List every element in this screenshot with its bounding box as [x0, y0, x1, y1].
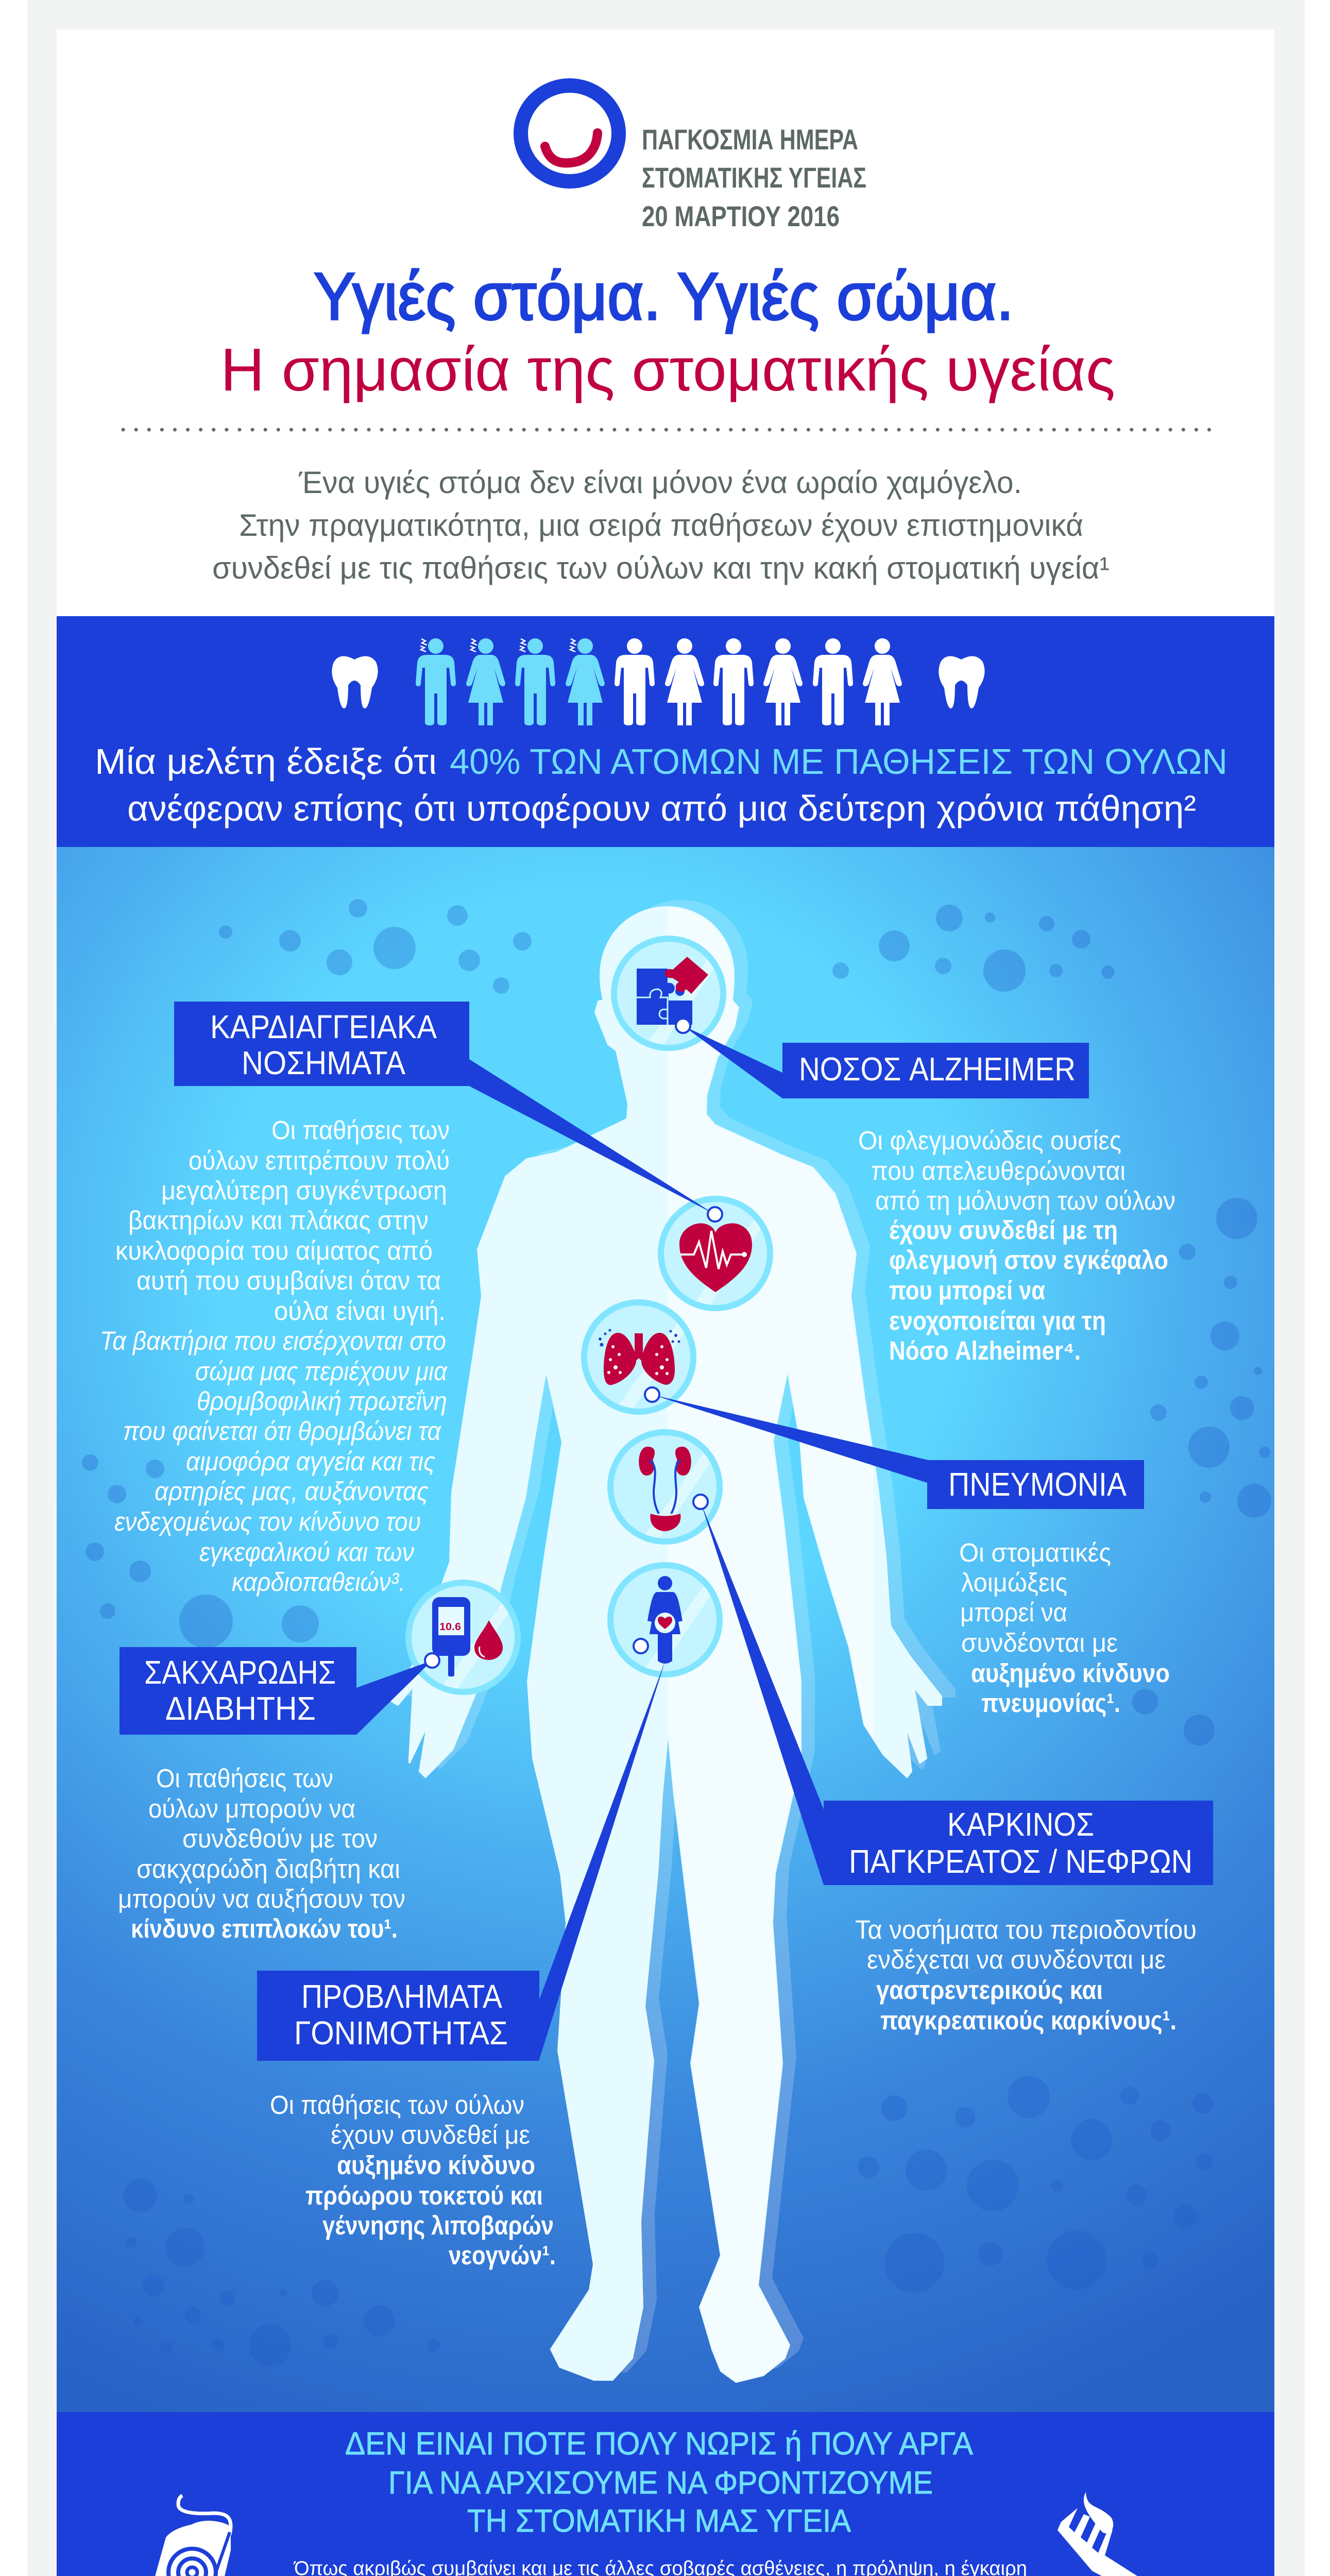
text: pneumonia: Οι στοματικές	[959, 1538, 1111, 1567]
label: pneumonia callout	[645, 1387, 1144, 1509]
text: cardiovascular: ούλα είναι υγιή.	[274, 1296, 446, 1326]
title: Η σημασία της στοματικής υγείας	[220, 336, 1115, 404]
text: alzheimer: που απελευθερώνονται	[871, 1156, 1126, 1185]
text: cardiovascular: αυτή που συμβαίνει όταν τα	[137, 1266, 441, 1295]
prevention heading: ΓΙΑ ΝΑ ΑΡΧΙΣΟΥΜΕ ΝΑ ΦΡΟΝΤΙΖΟΥΜΕ	[388, 2465, 933, 2501]
text: cardiovascular: βακτηρίων και πλάκας στην	[128, 1206, 429, 1235]
text: cancer: γαστρεντερικούς και	[876, 1975, 1103, 2005]
text: alzheimer: έχουν συνδεθεί με τη	[889, 1215, 1118, 1245]
text: fertility: αυξημένο κίνδυνο	[337, 2150, 535, 2180]
world oral health day logo: ΣΤΟΜΑΤΙΚΗΣ ΥΓΕΙΑΣ	[642, 161, 866, 194]
text: alzheimer: που μπορεί να	[889, 1276, 1045, 1305]
text: cardiovascular: ούλων επιτρέπουν πολύ	[189, 1146, 450, 1175]
node: brain puzzle	[611, 936, 726, 1051]
statistic text: ανέφεραν επίσης ότι υποφέρουν από μια δεύτερη χρόνια πάθηση²	[127, 788, 1196, 828]
label: diabetes callout	[120, 1647, 439, 1735]
intro text: Στην πραγματικότητα, μια σειρά παθήσεων έχουν επιστημονικά	[239, 508, 1083, 543]
text: cardiovascular: μεγαλύτερη συγκέντρωση	[161, 1176, 447, 1205]
node: mother and child	[607, 1562, 723, 1677]
text: pneumonia: λοιμώξεις	[961, 1568, 1067, 1597]
text: cardiovascular: ενδεχομένως τον κίνδυνο του	[114, 1507, 421, 1536]
text: alzheimer: από τη μόλυνση των ούλων	[875, 1186, 1175, 1215]
label: cardiovascular callout: ΝΟΣΗΜΑΤΑ	[242, 1044, 405, 1081]
text: diabetes	[118, 1764, 405, 1943]
icon: tooth left	[332, 656, 378, 708]
text: cancer	[855, 1915, 1197, 2035]
text: pneumonia: μπορεί να	[960, 1598, 1067, 1627]
icon: toothbrush	[1058, 2492, 1225, 2576]
text: cancer: παγκρεατικούς καρκίνους¹.	[880, 2006, 1176, 2035]
text: cardiovascular: κυκλοφορία του αίματος από	[115, 1236, 433, 1265]
label: diabetes callout: ΣΑΚΧΑΡΩΔΗΣ	[144, 1654, 336, 1691]
text: pneumonia: πνευμονίας¹.	[981, 1688, 1120, 1718]
prevention heading	[345, 2426, 974, 2539]
text: cardiovascular: αιμοφόρα αγγεία και τις	[186, 1447, 435, 1476]
text: diabetes: ούλων μπορούν να	[148, 1794, 355, 1823]
people pictogram: 4 of 10 highlighted	[416, 638, 902, 725]
text: alzheimer: φλεγμονή στον εγκέφαλο	[889, 1245, 1168, 1275]
label: cancer callout: ΚΑΡΚΙΝΟΣ	[947, 1806, 1094, 1843]
text: diabetes: Οι παθήσεις των	[156, 1764, 333, 1793]
panel: prevention	[57, 2412, 1274, 2576]
world oral health day logo: 20 ΜΑΡΤΙΟΥ 2016	[642, 200, 840, 232]
intro text: Ένα υγιές στόμα δεν είναι μόνον ένα ωραίο χαμόγελο.	[298, 465, 1022, 500]
label: cancer callout: ΠΑΓΚΡΕΑΤΟΣ / ΝΕΦΡΩΝ	[849, 1843, 1192, 1880]
label: alzheimer callout	[676, 1019, 1089, 1098]
node: lungs	[581, 1299, 696, 1415]
label: cardiovascular callout	[174, 1002, 722, 1222]
text: pneumonia	[959, 1538, 1170, 1718]
world oral health day logo: ΠΑΓΚΟΣΜΙΑ ΗΜΕΡΑ	[642, 123, 858, 156]
text: cardiovascular: Τα βακτήρια που εισέρχονται στο	[100, 1326, 446, 1355]
text: alzheimer: ενοχοποιείται για τη	[889, 1306, 1106, 1335]
intro text	[212, 465, 1110, 585]
intro text: συνδεθεί με τις παθήσεις των ούλων και την κακή στοματική υγεία¹	[212, 551, 1110, 585]
text: alzheimer	[858, 1126, 1175, 1365]
label: fertility callout: ΓΟΝΙΜΟΤΗΤΑΣ	[294, 2014, 508, 2052]
text: cardiovascular: αρτηρίες μας, αυξάνοντας	[155, 1477, 429, 1506]
text: diabetes: κίνδυνο επιπλοκών του¹.	[131, 1914, 398, 1943]
label: fertility callout: ΠΡΟΒΛΗΜΑΤΑ	[301, 1978, 502, 2015]
label: alzheimer callout: ΝΟΣΟΣ ALZHEIMER	[799, 1050, 1076, 1088]
text: pneumonia: αυξημένο κίνδυνο	[971, 1658, 1170, 1688]
text: cancer: Τα νοσήματα του περιοδοντίου	[855, 1915, 1197, 1944]
node: heart	[658, 1196, 773, 1311]
title	[220, 259, 1115, 404]
world oral health day logo	[521, 86, 866, 232]
text: fertility: γέννησης λιποβαρών	[322, 2211, 554, 2240]
panel: body diagram background	[57, 847, 1274, 2412]
text: pneumonia: συνδέονται με	[961, 1628, 1118, 1657]
human body silhouette	[390, 876, 956, 2421]
label: fertility callout	[257, 1639, 666, 2061]
text: fertility: πρόωρου τοκετού και	[305, 2181, 543, 2210]
text: cancer: ενδέχεται να συνδέονται με	[867, 1945, 1166, 1974]
text: fertility: έχουν συνδεθεί με	[331, 2120, 530, 2149]
text: cardiovascular: θρομβοφιλική πρωτεΐνη	[197, 1386, 447, 1416]
text: cardiovascular: καρδιοπαθειών³.	[232, 1567, 405, 1597]
label: pneumonia callout: ΠΝΕΥΜΟΝΙΑ	[948, 1466, 1127, 1503]
text: diabetes: συνδεθούν με τον	[182, 1824, 378, 1853]
text: alzheimer: Νόσο Alzheimer⁴.	[889, 1336, 1081, 1365]
text: fertility: Οι παθήσεις των ούλων	[270, 2090, 524, 2120]
node: kidneys	[607, 1429, 723, 1545]
text: alzheimer: Οι φλεγμονώδεις ουσίες	[858, 1126, 1121, 1155]
title: Υγιές στόμα. Υγιές σώμα.	[314, 259, 1014, 334]
node: glucose meter	[405, 1580, 521, 1695]
statistic text: Μία μελέτη έδειξε ότι	[95, 741, 437, 782]
icon: dental floss	[152, 2496, 231, 2576]
text: cardiovascular: που φαίνεται ότι θρομβώνει τα	[123, 1416, 442, 1446]
node: glucose meter: 10.6	[439, 1621, 461, 1633]
text: cardiovascular: εγκεφαλικού και των	[199, 1537, 414, 1567]
panel: statistic band	[57, 616, 1274, 847]
text: cardiovascular	[100, 1115, 450, 1597]
text: cardiovascular: Οι παθήσεις των	[271, 1115, 450, 1145]
label: cardiovascular callout: ΚΑΡΔΙΑΓΓΕΙΑΚΑ	[210, 1008, 437, 1045]
statistic text	[95, 741, 1227, 828]
background bubbles	[82, 899, 1271, 2366]
text: diabetes: μπορούν να αυξήσουν τον	[118, 1884, 405, 1913]
text: cardiovascular: σώμα μας περιέχουν μια	[195, 1357, 448, 1386]
text: diabetes: σακχαρώδη διαβήτη και	[137, 1854, 400, 1884]
statistic text: 40% ΤΩΝ ΑΤΟΜΩΝ ΜΕ ΠΑΘΗΣΕΙΣ ΤΩΝ ΟΥΛΩΝ	[450, 741, 1227, 782]
prevention heading: ΤΗ ΣΤΟΜΑΤΙΚΗ ΜΑΣ ΥΓΕΙΑ	[467, 2503, 851, 2539]
label: diabetes callout: ΔΙΑΒΗΤΗΣ	[165, 1690, 316, 1727]
prevention heading: ΔΕΝ ΕΙΝΑΙ ΠΟΤΕ ΠΟΛΥ ΝΩΡΙΣ ή ΠΟΛΥ ΑΡΓΑ	[345, 2426, 974, 2462]
text: fertility	[270, 2090, 556, 2270]
text: fertility: νεογνών¹.	[449, 2241, 556, 2270]
label: cancer callout	[693, 1495, 1213, 1885]
icon: tooth right	[939, 656, 985, 708]
